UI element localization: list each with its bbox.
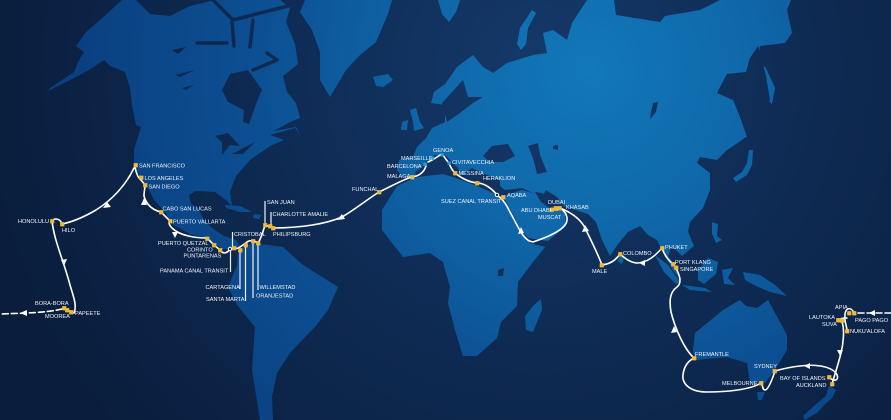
- labels: Pacific and Americas: MOOREA: [45, 314, 70, 320]
- labels: Asia and Oceania: PHUKET: [665, 245, 688, 251]
- arrow: Central America: [172, 232, 178, 238]
- Lake Baikal: [650, 102, 658, 119]
- arrow: Fiji south: [837, 350, 843, 356]
- port labels: [18, 148, 889, 389]
- labels: Europe and Middle East: GENOA: [433, 148, 453, 154]
- port markers: [50, 164, 856, 386]
- labels: Asia and Oceania: SINGAPORE: [680, 267, 714, 273]
- labels: Pacific and Americas: SANTA MARTA: [206, 297, 245, 303]
- Borneo: [698, 258, 718, 284]
- Cuba and Caribbean islands: [225, 205, 252, 212]
- labels: Europe and Middle East: KHASAB: [566, 205, 589, 211]
- route: Fiji to New Zealand: [832, 309, 854, 384]
- route: Pacific crossing west side, dashed: [0, 309, 62, 314]
- blue markers: Italy and France: [424, 153, 451, 166]
- labels: Asia and Oceania: FREMANTLE: [695, 352, 729, 358]
- labels: Pacific and Americas: PUERTO VALLARTA: [173, 220, 226, 226]
- labels: Pacific and Americas: PAPEETE: [75, 311, 101, 317]
- Mediterranean: [415, 152, 500, 196]
- Persian Gulf: [535, 192, 556, 210]
- route: San Francisco to Hilo: [62, 168, 134, 224]
- labels: Asia and Oceania: APIA: [835, 305, 848, 311]
- arrow: Red Sea: [518, 227, 524, 234]
- labels: Asia and Oceania: SUVA: [822, 322, 837, 328]
- labels: Pacific and Americas: PHILIPSBURG: [273, 232, 311, 238]
- Greenland: [300, 0, 392, 97]
- leader lines for Caribbean ports: [230, 201, 271, 301]
- route: Caribbean: [169, 221, 273, 253]
- route: Phuket to Male: [602, 248, 662, 265]
- New Guinea: [743, 272, 787, 296]
- Aral Sea: [553, 145, 558, 150]
- labels: Pacific and Americas: CORINTO: [187, 248, 213, 254]
- labels: Asia and Oceania: MELBOURNE: [722, 381, 758, 387]
- New Zealand: [803, 386, 836, 420]
- route: Hawaii: [52, 219, 62, 224]
- labels: Pacific and Americas: SAN JUAN: [267, 200, 295, 206]
- arrow: Pacific east dashed: [869, 310, 875, 316]
- arrow: Bay of Bengal: [639, 260, 645, 266]
- labels: Pacific and Americas: LOS ANGELES: [144, 176, 184, 182]
- labels: Pacific and Americas: BORA-BORA: [35, 301, 69, 307]
- labels: Europe and Middle East: BARCELONA: [387, 164, 422, 170]
- labels: Asia and Oceania: LAUTOKA: [809, 315, 835, 321]
- Sea of Japan: [722, 137, 746, 172]
- labels: Europe and Middle East: AQABA: [507, 193, 527, 199]
- labels: Asia and Oceania: SYDNEY: [754, 364, 777, 370]
- route: Pacific crossing east side, dashed: [855, 312, 891, 314]
- inland seas, lakes and bays: [172, 46, 770, 276]
- Madagascar: [525, 299, 542, 332]
- Baltic Sea: [442, 80, 483, 122]
- labels: Pacific and Americas: SAN DIEGO: [148, 184, 180, 190]
- labels: Asia and Oceania: AUCKLAND: [796, 383, 826, 389]
- labels: Europe and Middle East: MUSCAT: [538, 215, 562, 221]
- Sulawesi: [722, 268, 735, 285]
- Japan: [733, 150, 753, 182]
- route: Fremantle to Singapore: [662, 248, 694, 358]
- labels: Pacific and Americas: CHARLOTTE AMALIE: [272, 212, 328, 218]
- labels: Asia and Oceania: BAY OF ISLANDS: [780, 376, 826, 382]
- route: Honolulu to Papeete: [52, 221, 75, 313]
- labels: Europe and Middle East: [352, 148, 589, 221]
- route: Mediterranean: [342, 154, 497, 217]
- Africa: [382, 174, 545, 356]
- Great Lakes: [215, 133, 255, 155]
- route: Male to Khasab: [560, 208, 602, 265]
- arrow: Indian Ocean north: [671, 326, 677, 333]
- Arctic channels of Canada: [197, 0, 288, 70]
- labels: Pacific and Americas: CARTAGENA: [206, 285, 240, 291]
- arrow: Baja: [141, 198, 147, 205]
- labels: Pacific and Americas: HONOLULU: [18, 219, 49, 225]
- Australia: [693, 300, 787, 383]
- arrow: to Hawaii: [103, 202, 111, 208]
- route: New Zealand to Sydney: [775, 365, 838, 380]
- labels: Asia and Oceania: PORT KLANG: [675, 260, 711, 266]
- labels: Pacific and Americas: ORANJESTAD: [256, 294, 293, 300]
- Gulf of St Lawrence: [270, 128, 300, 140]
- Svalbard: [438, 0, 460, 22]
- direction arrows: [20, 198, 875, 369]
- labels: Pacific and Americas: PANAMA CANAL TRANSIT: [160, 268, 229, 274]
- labels: Asia and Oceania: MALE: [592, 269, 608, 275]
- labels: Europe and Middle East: FUNCHAL: [352, 187, 378, 193]
- labels: Pacific and Americas: [18, 164, 328, 320]
- Novaya Zemlya: [517, 10, 536, 50]
- Sea of Okhotsk: [717, 46, 770, 133]
- North America: [48, 0, 300, 249]
- route: Khasab to Suez: [497, 195, 567, 242]
- Lake Victoria: [498, 268, 504, 276]
- Tasmania: [757, 392, 765, 400]
- canal transit markers: [228, 193, 499, 251]
- Arabia: [503, 190, 566, 241]
- labels: Pacific and Americas: HILO: [62, 228, 76, 234]
- arrow: Arabian Sea: [582, 225, 589, 232]
- Eurasia: [397, 0, 792, 280]
- labels: Europe and Middle East: HERAKLION: [483, 176, 515, 182]
- labels: Pacific and Americas: PUNTARENAS: [184, 254, 222, 260]
- Caspian Sea: [528, 143, 547, 174]
- Iceland: [373, 74, 393, 87]
- labels: Europe and Middle East: CIVITAVECCHIA: [452, 160, 494, 166]
- labels: Europe and Middle East: ABU DHABI: [521, 208, 552, 214]
- labels: Pacific and Americas: SAN FRANCISCO: [139, 164, 186, 170]
- arrow: Pacific west dashed: [20, 310, 27, 316]
- Sri Lanka: [618, 255, 624, 264]
- labels: Asia and Oceania: PAGO PAGO: [855, 318, 889, 324]
- labels: Europe and Middle East: SUEZ CANAL TRANSIT: [441, 199, 502, 205]
- Great Bear and Slave lakes: [172, 47, 195, 90]
- labels: Pacific and Americas: WILLEMSTAD: [260, 285, 295, 291]
- labels: Asia and Oceania: NUKU'ALOFA: [850, 329, 885, 335]
- Great Britain and Ireland: [401, 120, 408, 130]
- Java: [682, 285, 712, 292]
- Philippines: [712, 222, 722, 243]
- labels: Europe and Middle East: DUBAI: [548, 200, 566, 206]
- labels: Asia and Oceania: [592, 245, 889, 389]
- labels: Pacific and Americas: PUERTO QUETZAL: [158, 241, 208, 247]
- arrow: North Atlantic: [337, 214, 345, 220]
- South America: [228, 243, 338, 420]
- arrow: Tasman: [804, 363, 810, 369]
- route lines: [0, 154, 891, 392]
- labels: Asia and Oceania: COLOMBO: [623, 251, 652, 257]
- Sumatra: [655, 255, 680, 284]
- route: Mexico to San Francisco: [135, 167, 170, 221]
- Black Sea: [483, 144, 515, 162]
- labels: Europe and Middle East: MESSINA: [458, 171, 484, 177]
- route: Australia south coast: [683, 358, 775, 392]
- labels: Europe and Middle East: MALAGA: [387, 174, 411, 180]
- Kamchatka: [758, 66, 775, 104]
- Hudson Bay: [222, 70, 262, 124]
- arrow: to Tahiti: [61, 259, 67, 266]
- route: Tahiti: [64, 308, 71, 312]
- labels: Europe and Middle East: MARSEILLE: [401, 156, 433, 162]
- labels: Pacific and Americas: CRISTOBAL: [234, 232, 266, 238]
- route: Atlantic crossing: [273, 217, 342, 228]
- labels: Pacific and Americas: CABO SAN LUCAS: [162, 206, 212, 212]
